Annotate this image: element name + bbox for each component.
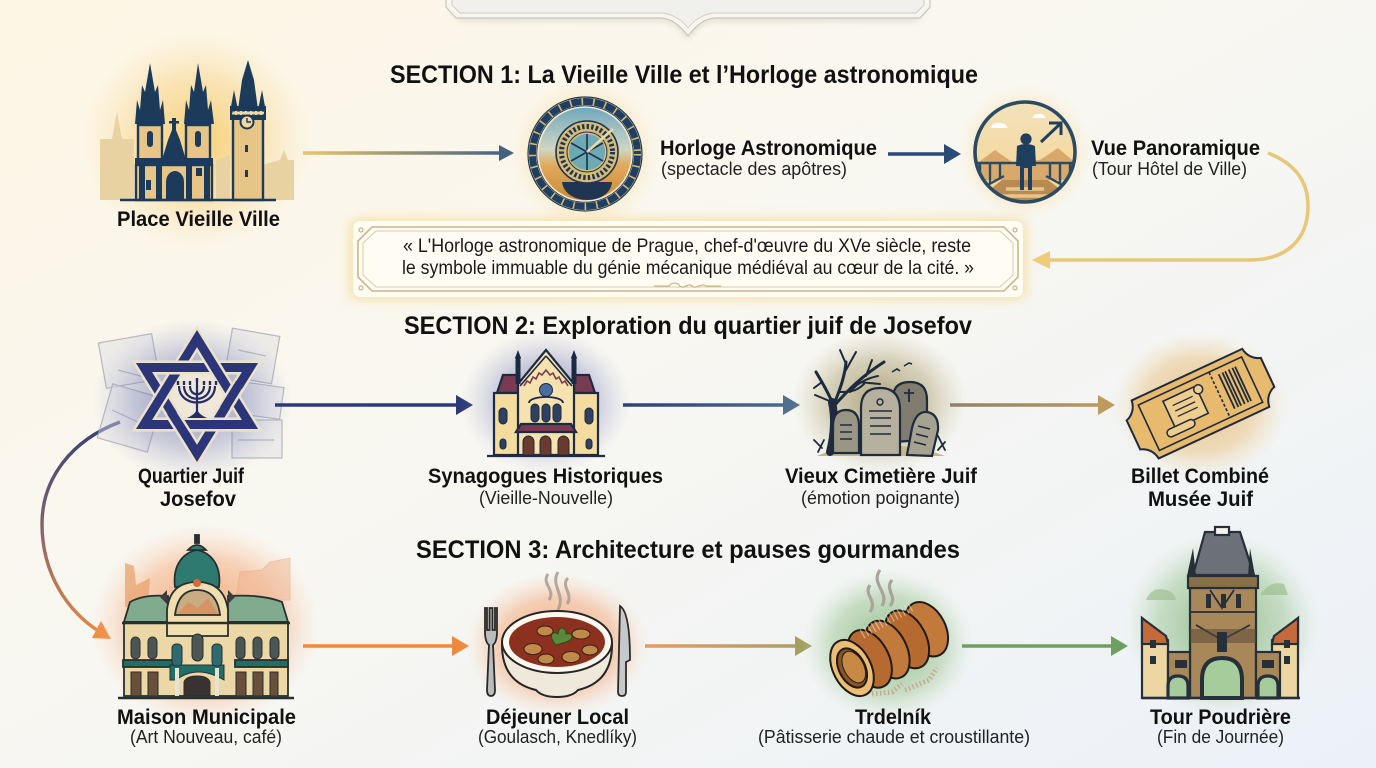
label: Vue Panoramique: Vue Panoramique	[1091, 137, 1260, 160]
icon: trdelník	[802, 569, 974, 721]
label: Place Vieille Ville: Place Vieille Ville	[117, 208, 280, 231]
label: Billet Combiné Musée Juif: Musée Juif	[1148, 488, 1254, 511]
arrow: maison to déjeuner	[303, 636, 469, 656]
arrow: cimetière to billet	[950, 395, 1115, 415]
arrow: place to horloge	[303, 145, 514, 161]
label: Tour Poudrière: (Fin de Journée)	[1157, 727, 1284, 747]
label: Vieux Cimetière Juif: (émotion poignante)	[801, 488, 960, 508]
label: Vue Panoramique: (Tour Hôtel de Ville)	[1092, 159, 1247, 179]
label: Synagogues Historiques: (Vieille-Nouvelle)	[479, 488, 613, 508]
arrow: horloge to vue	[888, 144, 961, 164]
icon: horloge astronomique	[509, 78, 661, 230]
heading: section 3: SECTION 3: Architecture et pauses gourmandes	[416, 536, 960, 564]
label: Trdelník	[758, 706, 1030, 747]
arrow: trdelník to tour	[962, 636, 1128, 656]
label: Trdelník: Trdelník	[855, 706, 931, 729]
label: Maison Municipale: Maison Municipale	[117, 706, 296, 729]
label: Synagogues Historiques	[428, 465, 663, 508]
label: Maison Municipale: (Art Nouveau, café)	[130, 727, 282, 747]
heading: section 1: SECTION 1: La Vieille Ville et l’Horloge astronomique	[390, 61, 978, 89]
label: Déjeuner Local	[478, 706, 637, 747]
label: Tour Poudrière: Tour Poudrière	[1150, 706, 1291, 729]
label: Quartier Juif Josefov: Josefov	[160, 488, 236, 511]
arrow: Josefov to synagogues	[275, 395, 473, 415]
heading: section 2: SECTION 2: Exploration du quartier juif de Josefov	[404, 312, 972, 340]
arrow: curve from vue to quote	[1032, 153, 1308, 269]
label: Maison Municipale	[117, 706, 296, 747]
label: Tour Poudrière	[1150, 706, 1291, 747]
label: Horloge Astronomique	[660, 137, 877, 179]
icon: synagogues	[460, 330, 632, 474]
label: Déjeuner Local: Déjeuner Local	[486, 706, 629, 729]
label: Vieux Cimetière Juif: Vieux Cimetière Juif	[785, 465, 978, 488]
icon: Quartier Juif	[92, 318, 292, 482]
label: Synagogues Historiques: Synagogues Historiques	[428, 465, 663, 488]
label: Déjeuner Local: (Goulasch, Knedlíky)	[478, 727, 637, 747]
label: Billet Combiné Musée Juif: Billet Combiné	[1131, 465, 1269, 488]
icon: billet combiné	[1112, 331, 1288, 479]
label: Vue Panoramique	[1091, 137, 1260, 179]
label: Billet Combiné Musée Juif	[1131, 465, 1269, 511]
icon: vieux cimetière	[792, 330, 968, 474]
arrow: curve from Josefov to Maison	[42, 422, 120, 639]
icon: vue panoramique	[960, 91, 1086, 214]
top banner panel	[446, 0, 930, 40]
callout: quote: « L'Horloge astronomique de Prague, chef-d'œuvre du XVe siècle, reste	[403, 236, 971, 257]
icon: Place Vieille Ville	[79, 28, 315, 252]
label: Horloge Astronomique: Horloge Astronomique	[660, 137, 877, 160]
label: Quartier Juif Josefov: Quartier Juif	[138, 465, 245, 488]
label: Quartier Juif Josefov	[138, 465, 245, 511]
arrow: synagogues to cimetière	[623, 395, 800, 415]
icon: Maison Municipale	[91, 525, 319, 725]
label: Horloge Astronomique: (spectacle des apôtres)	[661, 159, 847, 179]
label: Vieux Cimetière Juif	[785, 465, 978, 508]
arrow: déjeuner to trdelník	[645, 636, 812, 656]
label: Trdelník: (Pâtisserie chaude et croustillante)	[758, 727, 1030, 747]
callout: quote: le symbole immuable du génie mécanique médiéval au cœur de la cité. »	[402, 258, 974, 279]
icon: tour poudrière	[1124, 527, 1320, 717]
icon: déjeuner local	[465, 572, 649, 717]
callout: quote	[350, 219, 1026, 299]
